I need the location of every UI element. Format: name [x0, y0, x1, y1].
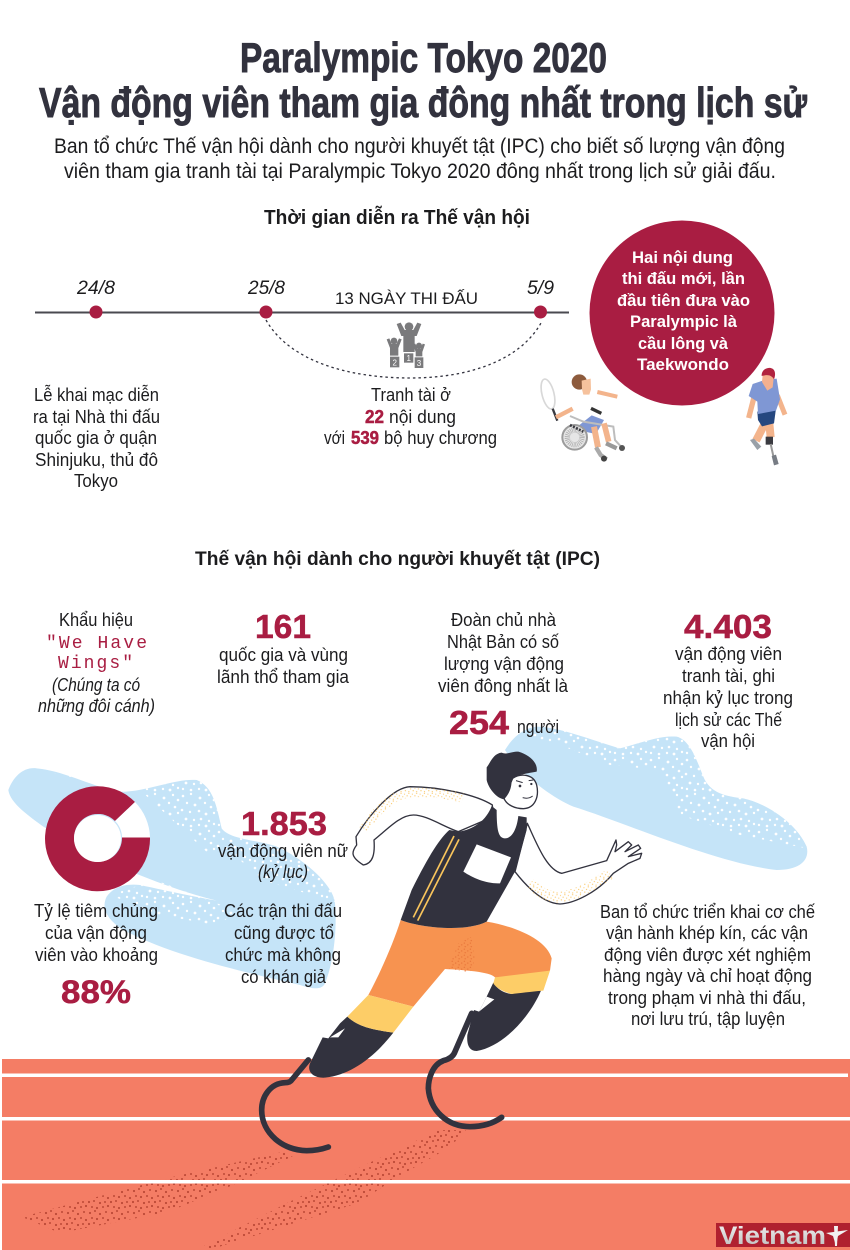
text: no spectators	[224, 901, 342, 987]
text: no spectators: chức mà không	[225, 945, 341, 965]
stat: 254 Japan athletes: người	[517, 717, 559, 737]
donut chart: 88%	[45, 786, 150, 891]
text: vaccination rate: Tỷ lệ tiêm chủng	[34, 901, 158, 921]
right knee gap	[479, 997, 494, 1012]
stat: 254 Japan athletes: lượng vận động	[444, 654, 564, 674]
stat: 1.853 female athletes: vận động viên nữ	[218, 841, 348, 861]
callout: new sports: Taekwondo	[637, 355, 729, 374]
callout: new sports: Hai nội dung	[632, 248, 733, 267]
timeline: 13 NGÀY THI ĐẤU	[335, 289, 478, 308]
text: vaccination rate	[34, 901, 158, 1010]
slogan: Khẩu hiệu	[59, 610, 133, 630]
shorts shading	[448, 937, 475, 973]
slogan	[38, 610, 155, 716]
timeline: 24/8	[76, 278, 115, 299]
stat: 254 Japan athletes: 254	[449, 704, 510, 741]
stat: 4.403 athletes: 4.403	[684, 608, 772, 645]
intro text	[54, 135, 785, 183]
text: closed-loop operation: Ban tổ chức triển khai cơ chế	[600, 902, 815, 922]
tank top	[401, 806, 527, 928]
text: closed-loop operation: nơi lưu trú, tập luyện	[631, 1009, 785, 1029]
right prosthetic blade	[428, 1013, 502, 1127]
text: opening ceremony: Lễ khai mạc diễn	[34, 384, 159, 405]
running track	[2, 1059, 850, 1250]
intro text: viên tham gia tranh tài tại Paralympic Tokyo 2020 đông nhất trong lịch sử giải đấu.	[64, 160, 776, 183]
text: competition	[324, 385, 497, 448]
text: vaccination rate: của vận động	[45, 923, 147, 943]
stat: 1.853 female athletes: (kỷ lục)	[258, 862, 308, 882]
title	[39, 34, 807, 126]
stat: 254 Japan athletes: Nhật Bản có số	[447, 632, 559, 652]
callout: new sports	[590, 220, 774, 406]
slogan: "We Have	[46, 634, 147, 654]
slogan: (Chúng ta có	[52, 675, 140, 695]
decorative blob: left	[8, 768, 336, 988]
stat: 254 Japan athletes	[438, 610, 569, 741]
right calf	[467, 983, 541, 1051]
left calf	[309, 1017, 393, 1078]
icon: medal podium	[387, 322, 425, 368]
text: closed-loop operation: vận hành khép kín, các vận	[606, 923, 808, 943]
text: no spectators: Các trận thi đấu	[224, 901, 342, 921]
text: vaccination rate: 88%	[61, 974, 131, 1010]
stat: 161 countries	[217, 608, 350, 687]
front arm	[515, 823, 642, 904]
text: opening ceremony: Shinjuku, thủ đô	[35, 450, 158, 470]
text: competition: 539	[351, 428, 379, 448]
stat: 254 Japan athletes: viên đông nhất là	[438, 676, 569, 696]
slogan: những đôi cánh)	[38, 696, 155, 716]
text: competition: 22	[365, 407, 384, 427]
text: opening ceremony	[33, 384, 160, 491]
icon: medal podium: 1	[406, 354, 411, 363]
back arm	[353, 787, 493, 865]
text: competition: Tranh tài ở	[371, 385, 451, 405]
text: closed-loop operation	[600, 902, 815, 1029]
stat: 161 countries: 161	[255, 608, 311, 645]
text: no spectators: có khán giả	[241, 967, 327, 987]
stat: 161 countries: quốc gia và vùng	[219, 645, 348, 665]
runner illustration	[262, 752, 642, 1151]
timeline	[35, 278, 569, 378]
icon: runner with prosthetic leg	[749, 368, 785, 465]
title: Paralympic Tokyo 2020	[240, 34, 607, 81]
left knee gap	[330, 1028, 345, 1037]
race bib	[463, 844, 511, 883]
text: competition: bộ huy chương	[384, 428, 497, 448]
stat: 4.403 athletes: vận hội	[701, 731, 755, 751]
text: vaccination rate: viên vào khoảng	[35, 945, 158, 965]
stat: 4.403 athletes: nhận kỷ lục trong	[663, 688, 793, 708]
logo: Vietnam+: Vietnam	[719, 1222, 826, 1250]
text: opening ceremony: quốc gia ở quận	[35, 428, 157, 448]
callout: new sports: thi đấu mới, lần	[622, 269, 745, 288]
stat: 1.853 female athletes	[218, 805, 348, 882]
intro text: Ban tổ chức Thế vận hội dành cho người khuyết tật (IPC) cho biết số lượng vận động	[54, 135, 785, 158]
heading: IPC: Thế vận hội dành cho người khuyết tật (IPC)	[195, 549, 600, 570]
text: opening ceremony: ra tại Nhà thi đấu	[33, 407, 160, 427]
decorative blob: right	[505, 726, 808, 870]
stat: 4.403 athletes: lịch sử các Thế	[675, 710, 782, 730]
timeline: 25/8	[247, 278, 285, 299]
stat: 161 countries: lãnh thổ tham gia	[217, 667, 350, 687]
head	[487, 752, 537, 809]
timeline: 5/9	[527, 278, 554, 299]
slogan: Wings"	[58, 654, 133, 674]
heading: event schedule: Thời gian diễn ra Thế vận hội	[264, 205, 530, 229]
callout: new sports: đầu tiên đưa vào	[617, 291, 750, 310]
left prosthetic blade	[262, 1060, 328, 1151]
stat: 4.403 athletes	[663, 608, 793, 751]
text: closed-loop operation: động viên được xét nghiệm	[604, 945, 811, 965]
text: no spectators: cũng được tổ	[234, 923, 334, 943]
right yellow band	[493, 971, 550, 994]
callout: new sports: cầu lông và	[638, 334, 729, 353]
jersey stripes	[413, 836, 459, 921]
text: competition: với	[324, 428, 345, 448]
stat: 1.853 female athletes: 1.853	[241, 805, 327, 842]
icon: medal podium: 3	[417, 359, 422, 368]
icon: medal podium: 2	[392, 358, 397, 367]
callout: new sports: Paralympic là	[630, 312, 738, 331]
stat: 4.403 athletes: vận động viên	[675, 644, 782, 664]
text: competition: nội dung	[389, 407, 456, 427]
left yellow band	[347, 995, 413, 1033]
shorts	[368, 920, 552, 1007]
stat: 254 Japan athletes: Đoàn chủ nhà	[451, 610, 557, 630]
icon: wheelchair badminton player	[538, 374, 625, 462]
text: opening ceremony: Tokyo	[74, 471, 118, 491]
stat: 4.403 athletes: tranh tài, ghi	[682, 666, 775, 686]
text: closed-loop operation: hàng ngày và chỉ hoạt động	[603, 966, 812, 986]
text: closed-loop operation: trong phạm vi nhà thi đấu,	[608, 988, 806, 1008]
